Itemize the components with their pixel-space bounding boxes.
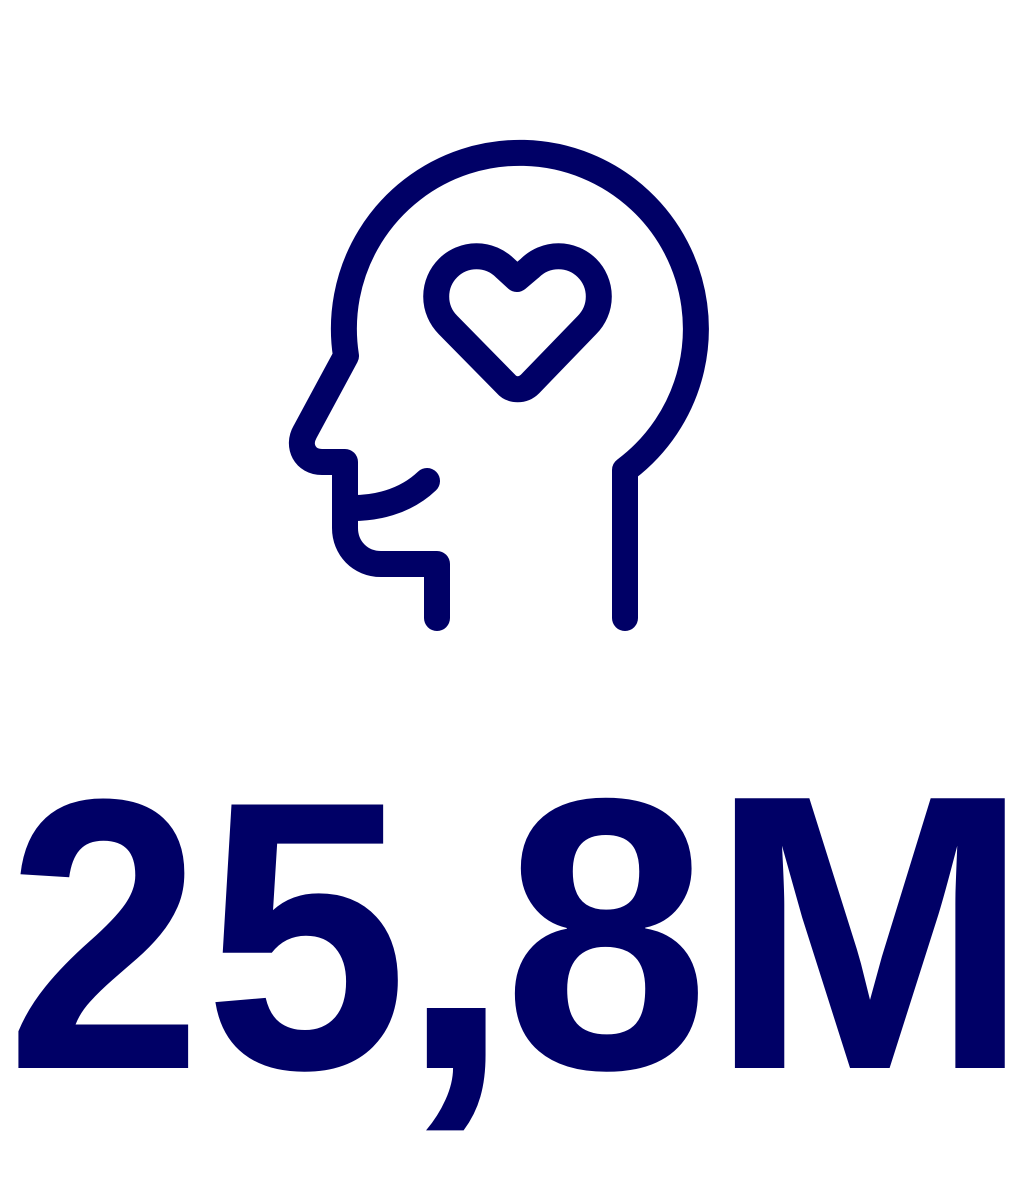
- stat value: [6, 703, 1031, 1154]
- stat value: ,: [398, 703, 513, 1154]
- stat value: 2: [6, 719, 202, 1150]
- stat value: 8: [503, 719, 709, 1151]
- icon: head with heart: [302, 153, 696, 618]
- stat value: M: [709, 714, 1031, 1152]
- stat value: 5: [204, 723, 408, 1150]
